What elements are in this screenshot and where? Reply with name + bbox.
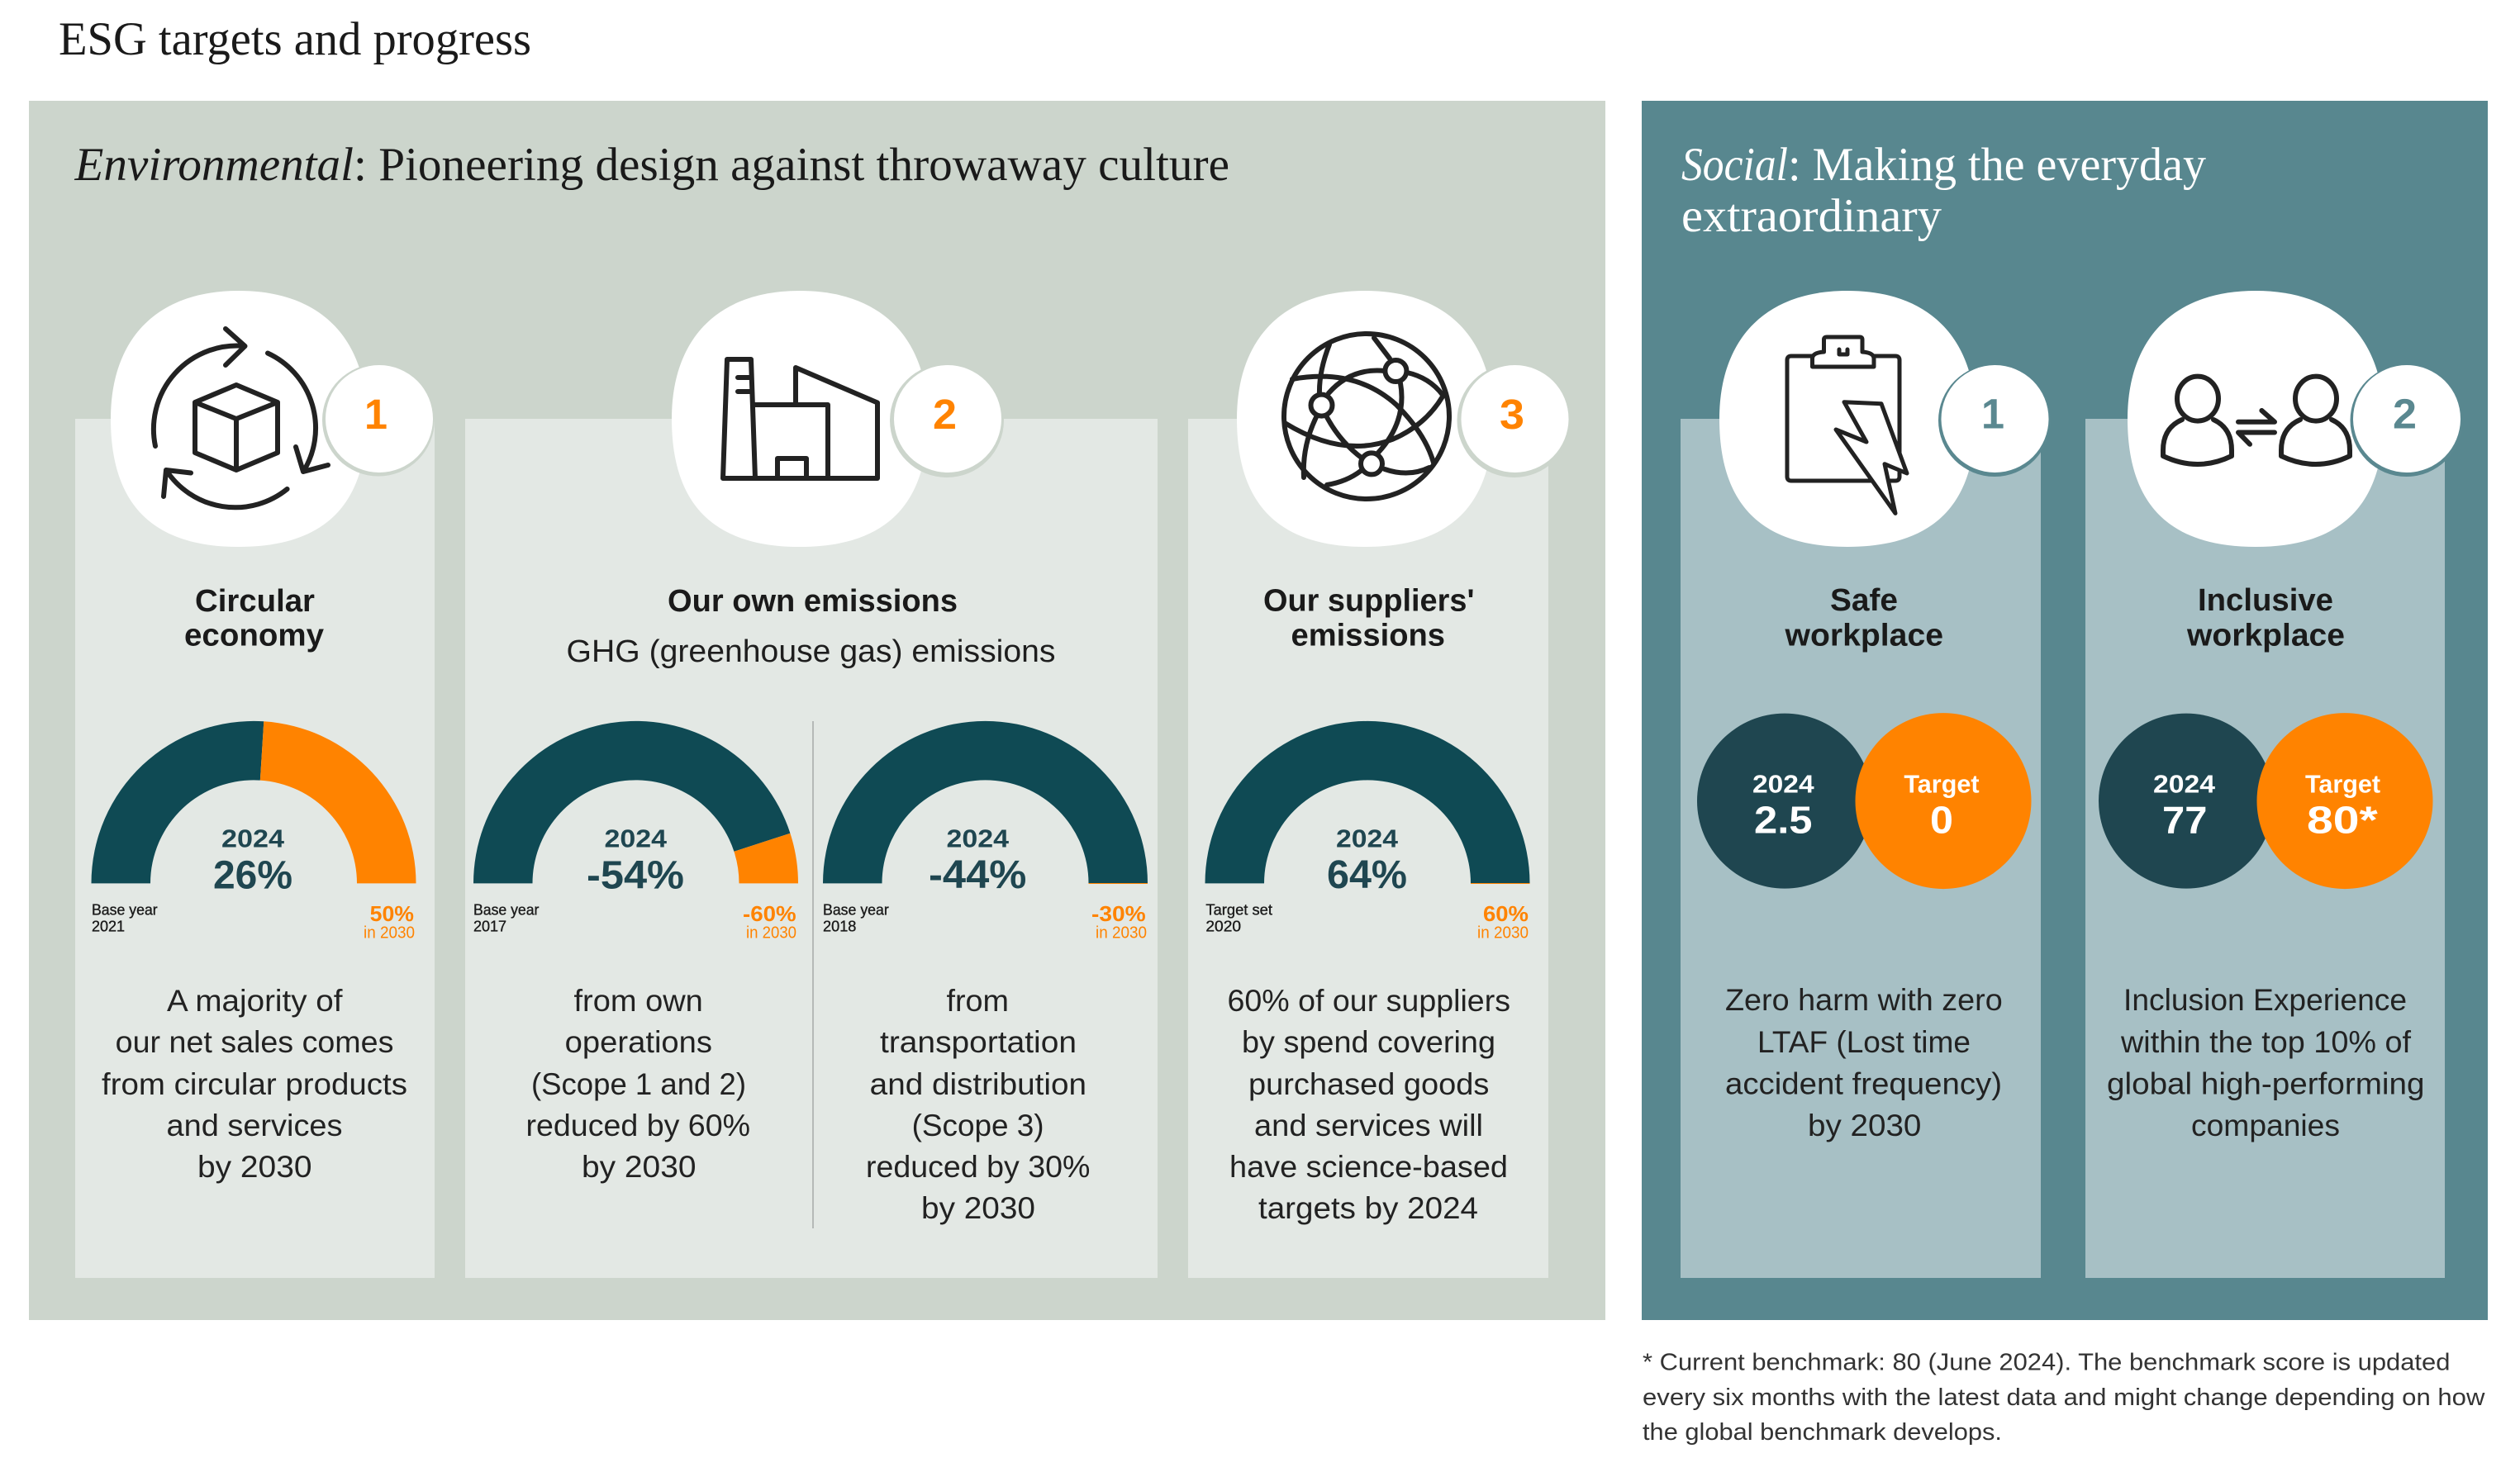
badge: 1: 1 (364, 391, 388, 438)
card: own emissions (465, 291, 1158, 1278)
text: safe workplace: Zero harm with zero (1725, 983, 2003, 1017)
gauge: scope 1 and 2 -54% (473, 721, 798, 942)
heading: social: Social (1681, 139, 1788, 191)
heading: own emissions (567, 584, 1056, 669)
gauge: circular economy 26%: 2024 (221, 824, 285, 852)
circles: safe workplace 2024 vs target: 0 (1930, 798, 1953, 841)
text: scope 3: reduced by 30% (866, 1150, 1090, 1184)
gauge: scope 1 and 2 -54%: in 2030 (746, 924, 796, 942)
text: scope 1 and 2: operations (565, 1025, 712, 1059)
title: ESG targets and progress (59, 13, 531, 65)
heading: inclusive workplace (2186, 583, 2345, 653)
card: safe workplace (1681, 291, 2051, 1278)
icon: clipboard with bolt blob (1719, 291, 1976, 547)
gauge: circular economy 26%: in 2030 (364, 924, 415, 942)
gauge: scope 3 -44% (823, 721, 1148, 942)
text: scope 3: transportation (880, 1025, 1077, 1059)
circles: inclusive workplace 2024 vs target: Target (2305, 770, 2380, 798)
gauge: scope 1 and 2 -54%: -54% (587, 854, 684, 897)
text: scope 1 and 2: by 2030 (582, 1150, 696, 1184)
circles: safe workplace 2024 vs target (1697, 713, 2031, 889)
text: circular economy: A majority of (167, 984, 343, 1018)
badge: 2: 2 (933, 391, 957, 438)
gauge: scope 3 -44%: in 2030 (1096, 924, 1147, 942)
gauge: suppliers 64%: 60% (1483, 901, 1529, 926)
circles: inclusive workplace 2024 vs target: 2024 (2153, 770, 2216, 798)
text: safe workplace: LTAF (Lost time (1757, 1025, 1971, 1059)
gauge: scope 1 and 2 -54%: -60% (743, 901, 796, 926)
text: inclusive workplace: within the top 10% of (2120, 1025, 2412, 1059)
text: scope 3: by 2030 (921, 1191, 1035, 1225)
text: scope 1 and 2: from own (573, 984, 703, 1018)
heading: circular economy: economy (184, 618, 324, 653)
circles: safe workplace 2024 vs target: 2024 (1752, 770, 1814, 798)
text: circular economy: and services (167, 1109, 342, 1142)
heading: own emissions: GHG (greenhouse gas) emissions (567, 634, 1056, 669)
text: circular economy: from circular products (102, 1067, 407, 1101)
badge: 3 (1457, 363, 1571, 477)
text: suppliers: by spend covering (1242, 1025, 1495, 1059)
gauge: circular economy 26%: 26% (213, 854, 292, 897)
circles: safe workplace 2024 vs target: Target (1904, 770, 1980, 798)
gauge: scope 3 -44%: 2024 (947, 824, 1010, 852)
footnote: every six months with the latest data and might change depending on how (1643, 1384, 2485, 1411)
text: circular economy: by 2030 (197, 1150, 312, 1184)
text: safe workplace (1725, 983, 2003, 1142)
text: scope 1 and 2 (525, 984, 750, 1184)
text: inclusive workplace: global high-performing (2107, 1067, 2424, 1100)
heading: suppliers emissions: emissions (1291, 618, 1445, 653)
gauge: suppliers 64%: in 2030 (1477, 924, 1529, 942)
badge: 2 (2350, 364, 2462, 477)
text: suppliers: purchased goods (1248, 1067, 1489, 1101)
icon: factory blob (672, 291, 928, 547)
text: circular economy: our net sales comes (116, 1025, 393, 1059)
heading: safe workplace (1784, 583, 1943, 653)
circles: inclusive workplace 2024 vs target: 80* (2307, 798, 2378, 841)
heading: inclusive workplace: workplace (2186, 618, 2345, 653)
card: inclusive workplace (2085, 291, 2462, 1278)
gauge: scope 3 -44%: Base year (823, 902, 889, 919)
heading: safe workplace: workplace (1784, 618, 1943, 653)
text: suppliers: targets by 2024 (1258, 1191, 1478, 1225)
heading: social: : Making the everyday (1788, 139, 2206, 191)
gauge: suppliers 64%: 2024 (1336, 824, 1399, 852)
icon: circular economy blob (111, 291, 367, 547)
heading: safe workplace: Safe (1830, 583, 1898, 618)
text: safe workplace: accident frequency) (1725, 1067, 2002, 1100)
heading: inclusive workplace: Inclusive (2198, 583, 2333, 618)
badge: 1 (322, 363, 435, 476)
badge: 2 (890, 363, 1004, 477)
heading: environmental: Environmental (74, 139, 354, 191)
text: suppliers: have science-based (1229, 1150, 1508, 1184)
circles: inclusive workplace 2024 vs target (2099, 713, 2432, 889)
icon: two people blob (2128, 291, 2384, 547)
badge: 1: 1 (1981, 390, 2004, 438)
gauge: circular economy 26%: Base year (92, 902, 158, 919)
text: inclusive workplace: companies (2191, 1109, 2340, 1142)
badge: 2: 2 (2393, 390, 2417, 438)
footnote: * Current benchmark: 80 (June 2024). The benchmark score is updated (1643, 1350, 2450, 1376)
gauge: circular economy 26% (91, 721, 416, 942)
text: scope 3: from (947, 984, 1009, 1018)
panel: environmental (29, 101, 1605, 1320)
gauge: scope 1 and 2 -54%: Base year (473, 902, 539, 919)
heading: circular economy (184, 584, 324, 653)
badge: 3: 3 (1500, 391, 1524, 438)
text: suppliers: and services will (1254, 1109, 1483, 1142)
heading: suppliers emissions (1263, 583, 1474, 653)
icon: globe blob (1237, 291, 1493, 547)
panel: social (1642, 101, 2488, 1320)
circles: safe workplace 2024 vs target: 2.5 (1754, 798, 1813, 841)
card: circular economy (75, 291, 435, 1278)
circles: inclusive workplace 2024 vs target: 77 (2162, 798, 2207, 841)
footnote (1643, 1350, 2485, 1446)
text: safe workplace: by 2030 (1808, 1109, 1921, 1142)
gauge: suppliers 64%: 2020 (1205, 919, 1241, 935)
gauge: circular economy 26%: 50% (370, 901, 414, 926)
gauge: scope 3 -44%: -44% (929, 853, 1026, 897)
text: inclusive workplace: Inclusion Experience (2123, 983, 2407, 1017)
heading: own emissions: Our own emissions (668, 584, 958, 619)
badge: 1 (1938, 364, 2051, 477)
gauge: scope 3 -44%: 2018 (823, 919, 856, 935)
gauge: circular economy 26%: 2021 (92, 919, 125, 935)
heading: circular economy: Circular (195, 584, 315, 619)
heading: suppliers emissions: Our suppliers' (1263, 583, 1474, 618)
text: scope 3: (Scope 3) (912, 1109, 1044, 1142)
text: scope 3 (866, 984, 1090, 1225)
text: suppliers: 60% of our suppliers (1228, 984, 1510, 1018)
gauge: suppliers 64% (1205, 721, 1530, 942)
text: circular economy (102, 984, 407, 1184)
text: scope 3: and distribution (870, 1067, 1086, 1101)
gauge: scope 3 -44%: -30% (1091, 901, 1146, 926)
gauge: suppliers 64%: 64% (1327, 853, 1407, 897)
gauge: scope 1 and 2 -54%: 2024 (605, 824, 668, 852)
card: suppliers emissions (1188, 291, 1571, 1278)
text: scope 1 and 2: reduced by 60% (525, 1109, 750, 1142)
heading: social (1681, 139, 2206, 242)
heading: social: extraordinary (1681, 190, 1942, 242)
text: inclusive workplace (2107, 983, 2424, 1142)
footnote: the global benchmark develops. (1643, 1419, 2002, 1446)
heading: environmental: : Pioneering design against throwaway culture (354, 139, 1229, 191)
text: suppliers (1228, 984, 1510, 1225)
gauge: scope 1 and 2 -54%: 2017 (473, 919, 506, 935)
text: scope 1 and 2: (Scope 1 and 2) (531, 1067, 746, 1101)
gauge: suppliers 64%: Target set (1205, 902, 1272, 919)
